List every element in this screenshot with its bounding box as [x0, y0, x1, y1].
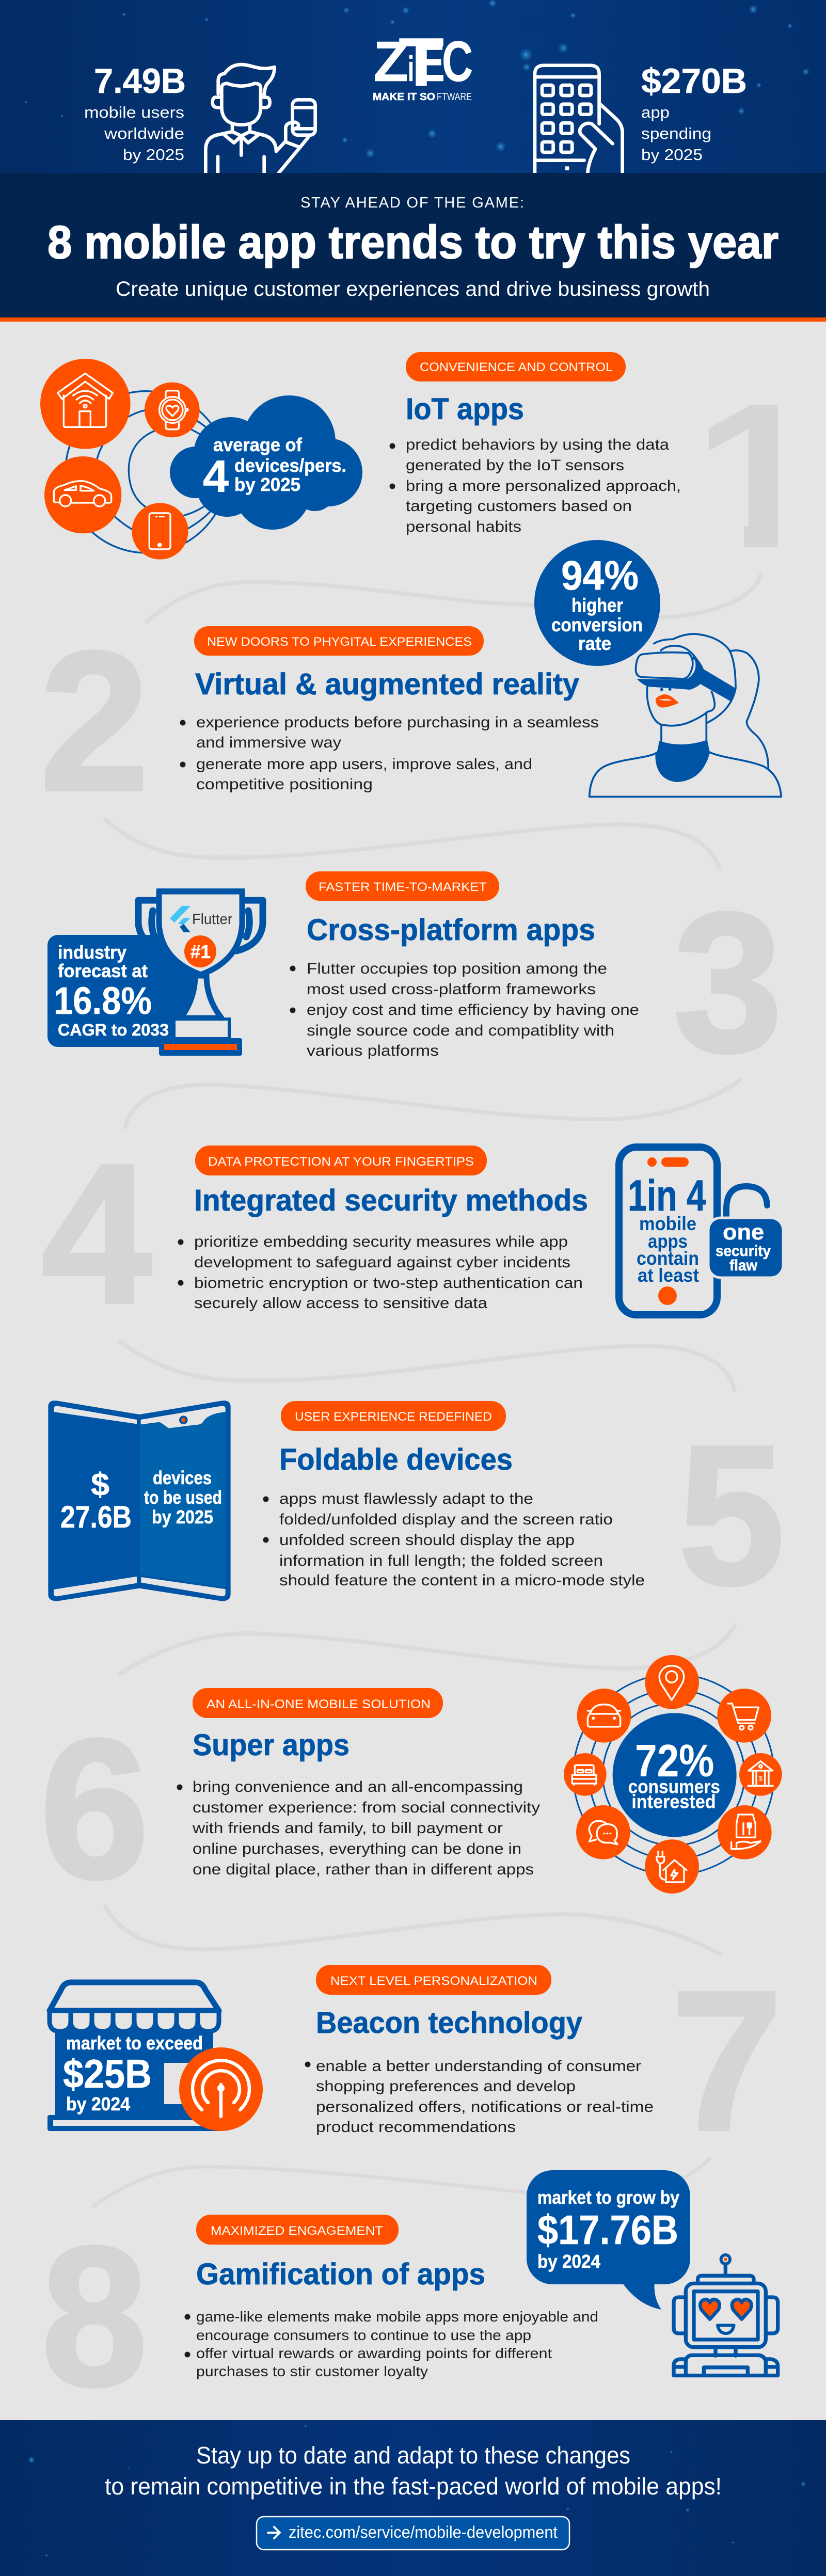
divider swoosh 4 — [120, 1342, 735, 1390]
panel: trend 5 foldable devices — [48, 1401, 785, 1626]
stat: $270B app spending: by 2025 — [641, 146, 703, 164]
icon: bank — [748, 1761, 773, 1786]
logo: Zitec: FTWARE — [437, 91, 472, 103]
icon: open lock one security flaw: flaw — [729, 1257, 758, 1274]
bullet list: enjoy cost and time efficiency by having one — [307, 1001, 639, 1019]
label pill: data protection — [195, 1146, 487, 1175]
logo: Zitec: T — [399, 24, 444, 101]
callout: industry forecast with trophy: CAGR to 2033 — [58, 1021, 169, 1039]
bullet list: experience products before purchasing in a seamless — [196, 714, 599, 731]
illustration: shop with beacon signal: by 2024 — [66, 2093, 130, 2114]
heading: super apps: Super apps — [193, 1728, 350, 1762]
label pill: convenience and control: CONVENIENCE AND CONTROL — [420, 360, 613, 374]
bullet list: and immersive way — [196, 734, 341, 751]
number 8: 8 — [41, 2205, 148, 2427]
footer banner — [0, 2420, 826, 2576]
bullet list: game-like elements make mobile apps more enjoyable and — [196, 2309, 598, 2325]
bullet list: information in full length; the folded screen — [279, 1552, 603, 1569]
bullet list: various platforms — [307, 1042, 439, 1059]
label pill: phygital experiences: NEW DOORS TO PHYGITAL EXPERIENCES — [207, 635, 472, 649]
bullet list: personalized offers, notifications or real-time — [316, 2098, 654, 2116]
label pill: next level personalization — [316, 1965, 551, 1995]
callout: 94% higher conversion rate: higher — [571, 595, 623, 616]
divider swoosh 7 — [94, 2158, 710, 2206]
illustration: phone and lock stat: 1in 4 — [628, 1171, 706, 1220]
bullet list: personal habits — [406, 518, 521, 535]
heading: foldable devices: Foldable devices — [279, 1443, 513, 1476]
stat: $270B app spending: app — [641, 103, 670, 121]
icon: open lock one security flaw: one — [723, 1220, 764, 1245]
cloud callout: 4 devices per person: by 2025 — [234, 474, 300, 495]
stat: 7.49B mobile users: worldwide — [104, 124, 184, 142]
icon: shopping cart — [728, 1704, 758, 1730]
icon: hand holding phone — [535, 66, 623, 173]
bullet list: offer virtual rewards or awarding points for different — [196, 2345, 552, 2361]
illustration: foldable phone stat: 27.6B — [60, 1500, 132, 1534]
callout: 94% higher conversion rate — [534, 540, 660, 666]
label pill: data protection: DATA PROTECTION AT YOUR FINGERTIPS — [208, 1155, 474, 1169]
link button — [257, 2517, 569, 2550]
label pill: all-in-one mobile solution: AN ALL-IN-ONE MOBILE SOLUTION — [206, 1697, 431, 1711]
bullet list: most used cross-platform frameworks — [307, 981, 596, 998]
bullet list: predict behaviors by using the data — [406, 436, 669, 453]
illustration: foldable phone stat — [48, 1401, 231, 1601]
cloud callout: 4 devices per person: 4 — [203, 451, 229, 502]
bullet list: development to safeguard against cyber incidents — [194, 1254, 570, 1271]
callout: 94% higher conversion rate: rate — [578, 633, 611, 654]
icon: car front — [587, 1705, 621, 1727]
divider swoosh 6 — [105, 1906, 721, 1954]
label pill: next level personalization: NEXT LEVEL PERSONALIZATION — [330, 1974, 537, 1988]
header starfield banner — [0, 0, 826, 176]
illustration: foldable phone stat: by 2025 — [152, 1506, 213, 1528]
callout: industry forecast with trophy: industry — [58, 942, 126, 963]
icon: open lock one security flaw: security — [716, 1243, 771, 1260]
label pill: user experience redefined: USER EXPERIENCE REDEFINED — [295, 1410, 492, 1424]
icon: location pin — [659, 1666, 684, 1700]
bullet list: single source code and compatiblity with — [307, 1022, 614, 1039]
illustration: shop with beacon signal: market to exceed — [66, 2032, 203, 2054]
panel: trend 8 gamification of apps — [41, 2170, 778, 2427]
bullet list: apps must flawlessly adapt to the — [279, 1490, 533, 1507]
callout: industry forecast with trophy: 16.8% — [54, 979, 152, 1022]
panel: trend 2 virtual and augmented reality — [40, 540, 781, 832]
callout: industry forecast with trophy — [47, 888, 263, 1056]
diagram: super app services around 72%: interested — [631, 1791, 716, 1812]
bullet list: encourage consumers to continue to use the app — [196, 2327, 531, 2343]
illustration: phone and lock stat: contain — [637, 1248, 699, 1269]
bullet list: unfolded screen should display the app — [279, 1532, 575, 1549]
bullet list: bring convenience and an all-encompassing — [193, 1778, 523, 1795]
number 4: 4 — [41, 1122, 153, 1345]
icon: bed — [572, 1765, 596, 1785]
logo: Zitec — [373, 24, 473, 103]
bullet list: product recommendations — [316, 2119, 516, 2136]
panel: trend 4 integrated security methods — [41, 1122, 783, 1345]
heading: gamification of apps: Gamification of apps — [196, 2257, 485, 2291]
icon: phone — [149, 513, 170, 549]
bullet list — [263, 1490, 645, 1589]
label pill: all-in-one mobile solution — [193, 1688, 443, 1718]
illustration: foldable phone stat: to be used — [144, 1487, 222, 1508]
bullet list: folded/unfolded display and the screen ratio — [279, 1511, 613, 1528]
heading: cross-platform apps: Cross-platform apps — [307, 913, 595, 947]
number 3: 3 — [673, 871, 783, 1093]
bullet list: should feature the content in a micro-mode style — [279, 1572, 645, 1589]
illustration: phone and lock stat: apps — [648, 1231, 688, 1252]
bullet list — [178, 1233, 583, 1312]
label pill: maximized engagement — [196, 2215, 399, 2245]
illustration: shop with beacon signal: $25B — [63, 2051, 152, 2096]
illustration: foldable phone stat: devices — [153, 1467, 212, 1488]
logo: Zitec: Z — [373, 30, 408, 93]
divider swoosh 5 — [120, 1626, 735, 1674]
bullet list: shopping preferences and develop — [316, 2078, 576, 2095]
cloud callout: 4 devices per person: average of — [213, 434, 303, 455]
icon: bank dollar sign: $ — [758, 1774, 763, 1782]
label pill: phygital experiences — [194, 626, 484, 656]
callout: market to grow by $17.76B — [527, 2170, 690, 2310]
heading: integrated security methods: Integrated security methods — [194, 1184, 588, 1217]
number 2: 2 — [40, 610, 149, 832]
stat: $270B app spending: spending — [641, 124, 711, 142]
label pill: faster time to market: FASTER TIME-TO-MARKET — [319, 880, 487, 894]
cloud callout: 4 devices per person: devices/pers. — [234, 455, 346, 476]
bullet list — [305, 2058, 654, 2136]
stat: $270B app spending: $270B — [641, 61, 747, 101]
illustration: foldable phone stat: $ — [91, 1467, 109, 1503]
icon: person holding phone — [205, 65, 315, 173]
panel: trend 6 super apps — [40, 1655, 782, 1920]
closing message: to remain competitive in the fast-paced world of mobile apps! — [105, 2473, 722, 2500]
logo: Zitec: C — [442, 30, 473, 93]
diagram: connected devices — [40, 359, 362, 560]
icon: trophy: Flutter — [192, 911, 232, 928]
divider swoosh 2 — [105, 820, 719, 867]
bullet list: one digital place, rather than in different apps — [193, 1861, 534, 1878]
bullet list: generated by the IoT sensors — [406, 457, 624, 474]
bullet list: generate more app users, improve sales, and — [196, 756, 532, 773]
diagram: super app services around 72%: consumers — [628, 1775, 720, 1797]
stat: 7.49B mobile users: 7.49B — [94, 61, 186, 101]
bullet list — [185, 2309, 598, 2379]
panel: trend 1 IoT apps — [40, 352, 826, 591]
icon: chat bubbles — [589, 1821, 617, 1844]
bullet list: with friends and family, to bill payment or — [192, 1820, 503, 1837]
bullet list — [389, 436, 681, 535]
number 1: 1 — [692, 360, 826, 591]
icon: car — [54, 481, 112, 506]
illustration: woman wearing VR headset — [590, 634, 781, 797]
cloud callout: 4 devices per person — [170, 395, 362, 530]
icon: food delivery — [732, 1815, 760, 1849]
illustration: phone and lock stat: at least — [638, 1265, 699, 1286]
title band: 8 mobile app trends to try this year — [47, 217, 779, 268]
bullet list: customer experience: from social connectivity — [193, 1799, 540, 1816]
bullet list: targeting customers based on — [406, 498, 632, 515]
illustration: phone and lock stat — [619, 1147, 783, 1315]
label pill: maximized engagement: MAXIMIZED ENGAGEMENT — [211, 2224, 383, 2238]
number 7: 7 — [671, 1949, 783, 2172]
callout: industry forecast with trophy: forecast at — [58, 960, 148, 981]
icon: beacon signal — [179, 2047, 263, 2131]
bullet list: prioritize embedding security measures while app — [194, 1233, 568, 1250]
bullet list: online purchases, everything can be done in — [193, 1840, 521, 1857]
heading: virtual and augmented reality: Virtual & augmented reality — [195, 667, 579, 701]
link button: zitec.com/service/mobile-development — [289, 2523, 558, 2541]
panel: trend 3 cross-platform apps — [47, 871, 783, 1093]
bullet list: securely allow access to sensitive data — [194, 1295, 487, 1312]
callout: market to grow by $17.76B: by 2024 — [537, 2251, 600, 2272]
closing message — [105, 2442, 722, 2500]
icon: open lock one security flaw — [708, 1186, 783, 1278]
bullet list: biometric encryption or two-step authentication can — [194, 1275, 583, 1292]
diagram: super app services around 72%: 72% — [635, 1735, 714, 1786]
stat: $270B app spending — [641, 61, 747, 164]
panel: trend 7 beacon technology — [47, 1949, 783, 2172]
icon: trophy: #1 — [190, 941, 211, 962]
icon: smart home — [58, 373, 113, 427]
callout: 94% higher conversion rate: conversion — [551, 614, 643, 635]
heading: beacon technology: Beacon technology — [316, 2006, 582, 2040]
title band — [0, 173, 826, 322]
bullet list: purchases to stir customer loyalty — [196, 2363, 428, 2379]
title band: STAY AHEAD OF THE GAME: — [300, 195, 524, 211]
bullet list — [177, 1778, 540, 1878]
closing message: Stay up to date and adapt to these changes — [196, 2442, 630, 2469]
logo: Zitec: MAKE IT SO — [373, 91, 435, 103]
title band: Create unique customer experiences and drive business growth — [116, 278, 710, 300]
heading: IoT apps: IoT apps — [406, 392, 524, 426]
illustration: phone and lock stat: mobile — [639, 1213, 696, 1234]
bullet list: enable a better understanding of consumer — [316, 2058, 641, 2075]
callout: 94% higher conversion rate: 94% — [561, 552, 639, 598]
label pill: convenience and control — [406, 352, 626, 381]
icon: smart plug and house — [657, 1852, 687, 1882]
logo: Zitec: E — [415, 33, 445, 93]
diagram: super app services around 72% — [564, 1655, 782, 1894]
callout: market to grow by $17.76B: market to grow by — [537, 2187, 679, 2208]
label pill: user experience redefined — [281, 1401, 506, 1431]
divider swoosh 3 — [125, 1080, 740, 1127]
illustration: robot with heart eyes — [674, 2255, 778, 2376]
label pill: faster time to market — [306, 871, 499, 901]
bullet list — [180, 714, 599, 793]
bullet list: competitive positioning — [196, 776, 373, 793]
number 6: 6 — [40, 1697, 149, 1920]
bullet list: bring a more personalized approach, — [406, 478, 681, 495]
icon: smart watch — [160, 391, 188, 430]
divider swoosh 1 — [147, 575, 761, 622]
stat: 7.49B mobile users: by 2025 — [123, 146, 184, 164]
stat: 7.49B mobile users — [84, 61, 186, 164]
icon: trophy — [138, 888, 263, 1056]
illustration: shop with beacon signal — [47, 1982, 263, 2131]
bullet list: Flutter occupies top position among the — [307, 960, 607, 977]
bullet list — [290, 960, 639, 1059]
logo: Zitec: i — [408, 49, 414, 89]
number 5: 5 — [678, 1404, 785, 1626]
callout: market to grow by $17.76B: $17.76B — [537, 2207, 678, 2253]
stat: 7.49B mobile users: mobile users — [84, 103, 184, 121]
